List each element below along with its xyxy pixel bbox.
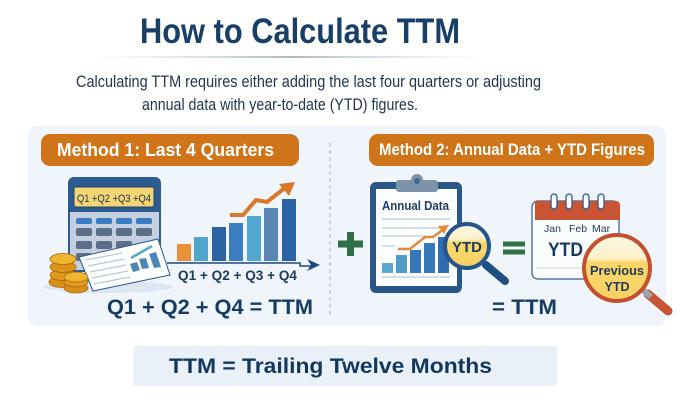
method 1 formula: Q1 + Q2 + Q4 = TTM [107, 296, 313, 319]
growth arrow [230, 187, 286, 215]
calculator display: Q1 +Q2 +Q3 +Q4 [77, 193, 151, 205]
icon: magnifier YTD [445, 224, 505, 281]
icon: magnifier previous YTD: YTD [604, 280, 630, 294]
title underline [92, 56, 487, 58]
icon: clipboard [370, 174, 462, 293]
icon: calendar: Feb [569, 223, 587, 235]
definition banner [133, 346, 557, 386]
intro text: Calculating TTM requires either adding the last four quarters or adjusting [76, 73, 541, 91]
icon: plus [338, 232, 363, 256]
icon: calendar: Jan [544, 223, 561, 235]
method 2 heading [369, 134, 654, 166]
intro text: annual data with year-to-date (YTD) figures. [142, 96, 418, 114]
icon: calendar: YTD [548, 240, 583, 261]
method 1 heading [41, 134, 299, 166]
icon: clipboard: Annual Data [382, 199, 450, 213]
icon: calculator [68, 177, 161, 272]
icon: calendar: Mar [592, 223, 611, 235]
icon: magnifier YTD: YTD [452, 239, 482, 256]
intro text [76, 73, 541, 114]
icon: magnifier previous YTD [584, 235, 668, 311]
icon: coins [49, 254, 88, 293]
axis arrow [167, 263, 316, 266]
method 2 heading: Method 2: Annual Data + YTD Figures [379, 141, 645, 159]
method 1 heading: Method 1: Last 4 Quarters [57, 140, 274, 160]
method 2 result: = TTM [492, 296, 557, 319]
definition banner: TTM = Trailing Twelve Months [169, 355, 492, 378]
icon: magnifier previous YTD: Previous [590, 264, 644, 278]
icon: paper report [79, 239, 170, 291]
bar chart [167, 182, 320, 271]
title: How to Calculate TTM [140, 12, 460, 51]
panel: methods [28, 126, 668, 326]
icon: calendar [532, 194, 620, 279]
quarters label: Q1 + Q2 + Q3 + Q4 [178, 268, 297, 283]
icon: equals [503, 244, 525, 252]
shadow under coins and paper [43, 281, 173, 293]
clipboard clip [396, 174, 438, 192]
